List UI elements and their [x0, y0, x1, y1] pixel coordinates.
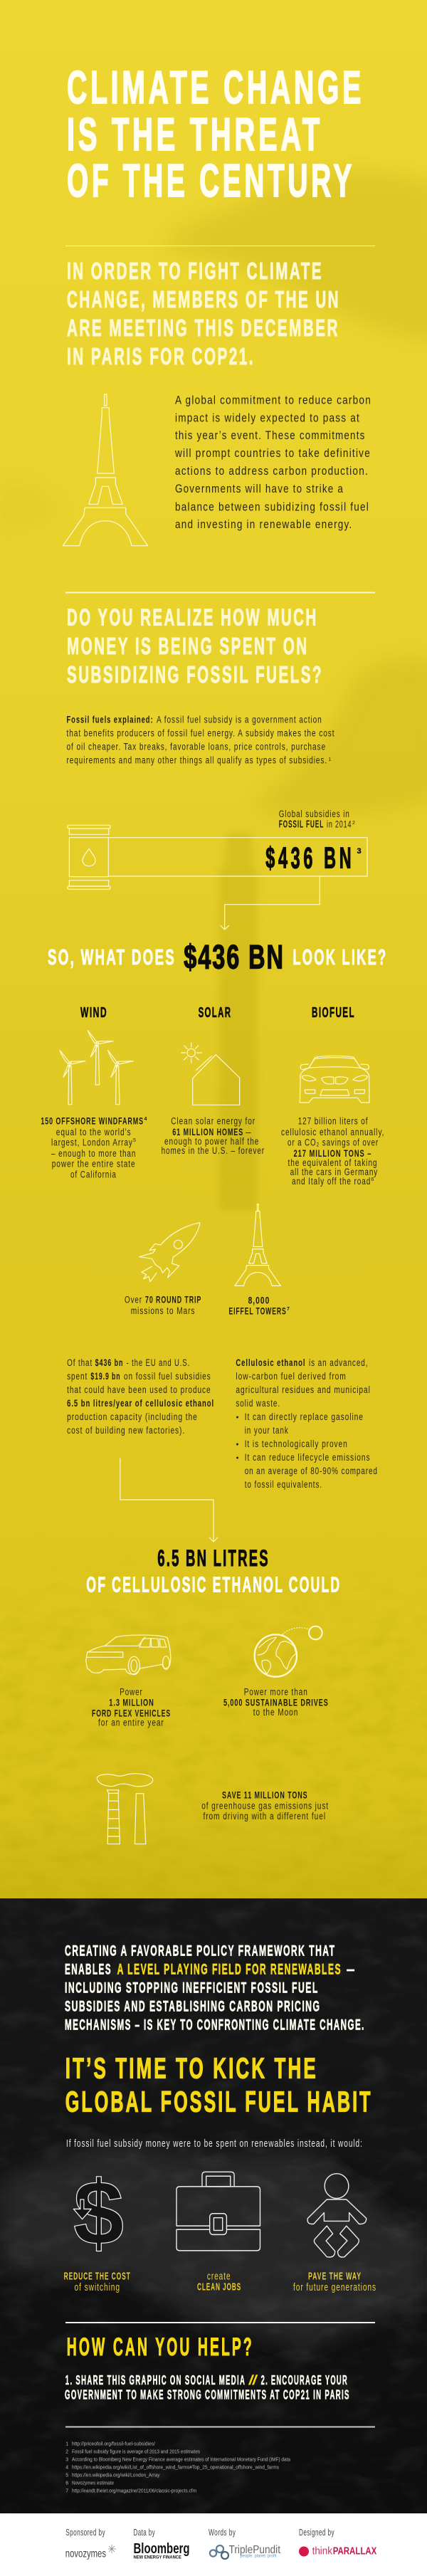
icon: SUV	[86, 1635, 171, 1675]
callout: global subsidies label: 2	[352, 821, 355, 826]
footnotes: Fossil fuel subsidy figure is average of 2013 and 2015 estimates	[72, 2450, 200, 2455]
panel: footer credits	[0, 2513, 427, 2576]
text block: EU and US spend: cost of building new factories).	[67, 1425, 185, 1436]
text block: cellulosic ethanol explained: solid waste.	[236, 1398, 280, 1409]
credit: words by TriplePundit: TriplePundit	[229, 2544, 280, 2556]
text block: save 11 million tons	[201, 1789, 329, 1821]
callout: $436 BN box and connector arrow: 3	[357, 847, 362, 856]
text block: global commitment: A global commitment to reduce carbon	[175, 394, 371, 407]
text block: solar fact	[162, 1116, 265, 1156]
callout: global subsidies label: Global subsidies in	[279, 809, 350, 819]
credit: data by Bloomberg	[134, 2527, 189, 2560]
text block: solar fact: –	[246, 1127, 252, 1137]
footnotes: 2	[65, 2450, 68, 2455]
text block: save 11 million tons: from driving with a different fuel	[204, 1811, 326, 1821]
text block: wind fact: of California	[70, 1169, 117, 1180]
heading: how much money	[67, 604, 323, 688]
arrow: to cellulosic ethanol heading	[120, 1458, 218, 1542]
heading: so what does $436 BN look like: SO, WHAT DOES	[48, 945, 176, 969]
icon: briefcase	[176, 2172, 260, 2251]
text block: cellulosic ethanol explained: Cellulosic ethanol	[236, 1357, 305, 1368]
text block: EU and US spend: $19.9 bn	[90, 1371, 121, 1382]
text block: actions: 1. SHARE THIS GRAPHIC ON SOCIAL MEDIA	[65, 2372, 246, 2387]
panel: yellow background with smoke	[0, 0, 427, 1898]
text block: global commitment: impact is widely expected to pass at	[175, 411, 360, 424]
label: pave the way for future generations: for future generations	[293, 2282, 376, 2293]
text block: Mars missions: 70 ROUND TRIP	[145, 1294, 201, 1305]
credit: sponsored by novozymes: Sponsored by	[65, 2527, 105, 2538]
text block: Eiffel Towers: EIFFEL TOWERS	[229, 1305, 287, 1317]
text block: Ford Flex: 1.3 MILLION	[109, 1697, 154, 1708]
text block: cellulosic ethanol explained: It is technologically proven	[245, 1439, 348, 1449]
icon: dollar with down arrow: $	[73, 2162, 124, 2264]
text block: fossil fuels explained: 1	[329, 757, 332, 762]
icon: wind turbines	[60, 1031, 133, 1105]
text block: EU and US spend: that could have been used to produce	[67, 1384, 211, 1395]
text block: biofuel fact: 127 billion liters of	[298, 1116, 368, 1127]
icon: earth and moon	[255, 1626, 322, 1677]
label: reduce the cost of switching	[64, 2271, 131, 2293]
text block: solar fact: Clean solar energy for	[171, 1116, 255, 1127]
text block: cellulosic ethanol explained: in your tank	[245, 1425, 289, 1436]
text block: save 11 million tons: of greenhouse gas emissions just	[201, 1801, 329, 1812]
text block: drives to the Moon: to the Moon	[253, 1707, 298, 1718]
footnotes: https://en.wikipedia.org/wiki/London_Array	[72, 2474, 160, 2478]
text block: fossil fuels explained	[67, 715, 334, 766]
callout: $436 BN box and connector arrow: $436 BN	[265, 841, 354, 874]
footnotes: http://eandt.theiet.org/magazine/2011/06/classic-projects.cfm	[72, 2489, 196, 2494]
text block: EU and US spend: spent	[67, 1371, 88, 1382]
heading: solar: SOLAR	[199, 1005, 231, 1021]
label: pave the way for future generations	[293, 2271, 376, 2293]
icon: sun and house	[181, 1043, 240, 1105]
callout: $436 BN box and connector arrow	[108, 838, 367, 930]
credit: words by TriplePundit: Words by	[209, 2527, 236, 2538]
text block: EU and US spend: Of that	[67, 1357, 93, 1368]
credit: data by Bloomberg: Data by	[134, 2527, 155, 2538]
text block: solar fact: 61 MILLION HOMES	[172, 1126, 243, 1137]
footnotes	[65, 2442, 290, 2494]
text block: Ford Flex: Power	[120, 1687, 143, 1698]
text block: wind fact: 150 OFFSHORE WINDFARMS	[41, 1115, 144, 1127]
text block: global commitment: Governments will have to strike a	[175, 483, 344, 495]
footnotes: 5	[65, 2474, 68, 2478]
text block: cellulosic ethanol explained: It can directly replace gasoline	[245, 1411, 364, 1422]
text block: drives to the Moon: 5,000 SUSTAINABLE DRIVES	[223, 1697, 329, 1708]
label: reduce the cost of switching: REDUCE THE COST	[64, 2271, 131, 2282]
heading: kick the fossil fuel habit	[65, 2052, 373, 2118]
text block: biofuel fact: 6	[371, 1177, 374, 1182]
text block: Eiffel Towers: 8,000	[248, 1294, 270, 1305]
text block: biofuel fact: or a CO₂ savings of over	[288, 1137, 379, 1147]
footnotes: https://en.wikipedia.org/wiki/List_of_offshore_wind_farms#Top_25_operational_offshore_wind_farms	[72, 2466, 279, 2471]
footnotes: 6	[65, 2481, 68, 2486]
credit: designed by thinkPARALLAX	[299, 2527, 376, 2557]
icon: smokestacks	[97, 1774, 153, 1844]
text block: EU and US spend	[67, 1357, 214, 1436]
text block: drives to the Moon	[223, 1687, 329, 1718]
text block: Mars missions	[125, 1294, 201, 1316]
callout: global subsidies label	[279, 809, 355, 831]
text block: Mars missions: missions to Mars	[131, 1305, 195, 1316]
text block: cellulosic ethanol explained	[236, 1357, 378, 1490]
heading: how can you help: HOW CAN YOU HELP?	[67, 2333, 254, 2361]
credit: words by TriplePundit	[209, 2527, 280, 2559]
panel: dark section background	[0, 1898, 427, 2513]
text block: EU and US spend: $436 bn	[95, 1357, 123, 1368]
text block: actions	[65, 2372, 350, 2402]
text block: cellulosic ethanol explained: to fossil equivalents.	[245, 1479, 322, 1490]
icon: rocket	[139, 1223, 200, 1282]
text block: global commitment: actions to address carbon production.	[175, 465, 369, 478]
text block: biofuel fact: cellulosic ethanol annually,	[281, 1127, 384, 1137]
text block: global commitment: this year’s event. These commitments	[175, 429, 366, 442]
text block: actions: //	[248, 2372, 258, 2387]
subheading: COP21 intro: IN PARIS FOR COP21.	[67, 343, 255, 369]
text block: Mars missions: Over	[125, 1295, 142, 1305]
credit: data by Bloomberg: NEW ENERGY FINANCE	[134, 2555, 181, 2560]
icon: small Eiffel Tower	[235, 1204, 280, 1286]
footnotes: 3	[65, 2458, 68, 2463]
text block: solar fact: enough to power half the	[164, 1136, 259, 1147]
title	[67, 61, 364, 206]
credit: designed by thinkPARALLAX: think	[312, 2545, 332, 2557]
text block: cellulosic ethanol explained: It can reduce lifecycle emissions	[245, 1452, 370, 1463]
text block: wind fact: 5	[133, 1138, 136, 1143]
text block: EU and US spend: - the EU and U.S.	[127, 1357, 190, 1368]
text block: fossil fuels explained: A fossil fuel subsidy is a government action	[157, 715, 322, 725]
footnotes: Novozymes estimate	[72, 2481, 114, 2486]
text block: Eiffel Towers: 7	[287, 1307, 290, 1312]
icon: baby	[307, 2174, 367, 2257]
text block: biofuel fact: all the cars in Germany	[290, 1167, 378, 1177]
text block: wind fact: power the entire state	[52, 1159, 136, 1169]
subheading: COP21 intro	[67, 258, 340, 369]
footnotes: http://priceofoil.org/fossil-fuel-subsidies/	[72, 2442, 155, 2447]
text block: global commitment: balance between subidizing fossil fuel	[175, 501, 369, 514]
heading: so what does $436 BN look like: $436 BN	[184, 938, 285, 976]
label: create clean jobs	[197, 2271, 241, 2293]
text block: global commitment: and investing in renewable energy.	[175, 518, 353, 531]
footnotes: 7	[65, 2489, 68, 2494]
text block: cellulosic ethanol explained: is an advanced,	[309, 1357, 368, 1368]
text block: biofuel fact: 217 MILLION TONS –	[293, 1147, 371, 1159]
icon: Eiffel Tower	[63, 394, 148, 546]
text block: Ford Flex: for an entire year	[98, 1717, 164, 1728]
credit: designed by thinkPARALLAX: Designed by	[299, 2527, 334, 2538]
text block: biofuel fact: and Italy off the road	[292, 1176, 371, 1187]
text block: fossil fuels explained: of oil cheaper. Tax breaks, favorable loans, price controls, purchase	[67, 742, 326, 752]
footnotes: 1	[65, 2442, 68, 2447]
credit: sponsored by novozymes	[65, 2527, 116, 2560]
text block: EU and US spend: on fossil fuel subsidies	[124, 1371, 211, 1382]
text block: wind fact	[41, 1115, 147, 1180]
icon: front view car	[300, 1056, 369, 1103]
text block: EU and US spend: 6.5 bn litres/year of cellulosic ethanol	[67, 1398, 214, 1409]
text block: wind fact: – enough to more than	[51, 1148, 136, 1159]
text block: Ford Flex	[92, 1687, 171, 1728]
callout: global subsidies label: FOSSIL FUEL	[279, 819, 324, 831]
text block: save 11 million tons: SAVE 11 MILLION TONS	[222, 1789, 307, 1800]
text block: policy framework: –	[347, 1962, 357, 1977]
label: create clean jobs: create	[207, 2271, 231, 2282]
text block: drives to the Moon: Power more than	[244, 1687, 308, 1698]
label: pave the way for future generations: PAVE THE WAY	[308, 2271, 362, 2282]
credit: sponsored by novozymes: novozymes	[65, 2548, 106, 2560]
text block: solar fact: homes in the U.S. – forever	[162, 1145, 265, 1156]
heading: biofuel: BIOFUEL	[312, 1005, 355, 1021]
text block: EU and US spend: production capacity (including the	[67, 1411, 198, 1422]
credit: words by TriplePundit: people. planet. profit	[241, 2554, 277, 2558]
text block: wind fact: largest, London Array	[51, 1137, 133, 1147]
text block: policy framework: ENABLES	[65, 1962, 112, 1977]
heading: 6.5 BN litres	[86, 1545, 341, 1597]
label: reduce the cost of switching: of switching	[74, 2282, 120, 2293]
text block: cellulosic ethanol explained: low-carbon fuel derived from	[236, 1371, 347, 1382]
credit: data by Bloomberg: Bloomberg	[134, 2541, 189, 2557]
footnotes: According to Bloomberg New Energy Finance average estimates of International Monetary Fund (IMF) data	[72, 2458, 290, 2463]
label: create clean jobs: CLEAN JOBS	[197, 2281, 241, 2293]
footnotes: 4	[65, 2466, 68, 2471]
text block: fossil fuels explained: that benefits producers of fossil fuel energy. A subsidy makes the cost	[67, 728, 334, 739]
text block: Ford Flex: FORD FLEX VEHICLES	[92, 1707, 171, 1718]
credit: designed by thinkPARALLAX: PARALLAX	[333, 2545, 376, 2557]
text block: Eiffel Towers	[229, 1294, 290, 1317]
heading: so what does $436 BN look like	[48, 938, 387, 976]
text block: cellulosic ethanol explained: on an average of 80-90% compared	[245, 1466, 378, 1476]
heading: 6.5 BN litres: 6.5 BN LITRES	[157, 1545, 270, 1571]
heading: wind: WIND	[80, 1005, 107, 1021]
text block: wind fact: equal to the world’s	[56, 1127, 131, 1137]
text block: global commitment: will prompt countries to take definitive	[174, 447, 371, 460]
text block: fossil fuels explained: requirements and many other things all qualify as types of subsidies.	[67, 755, 327, 766]
text block: biofuel fact: the equivalent of taking	[288, 1157, 377, 1168]
text block: cellulosic ethanol explained: agricultural residues and municipal	[236, 1384, 371, 1395]
callout: global subsidies label: in 2014	[327, 819, 352, 830]
text block: policy framework	[65, 1943, 365, 2034]
text block: wind fact: 4	[144, 1117, 147, 1122]
text block: global commitment	[174, 394, 371, 531]
text block: fossil fuels explained: Fossil fuels explained:	[67, 715, 154, 725]
text block: biofuel fact	[281, 1116, 384, 1187]
icon: oil barrel	[68, 825, 110, 889]
